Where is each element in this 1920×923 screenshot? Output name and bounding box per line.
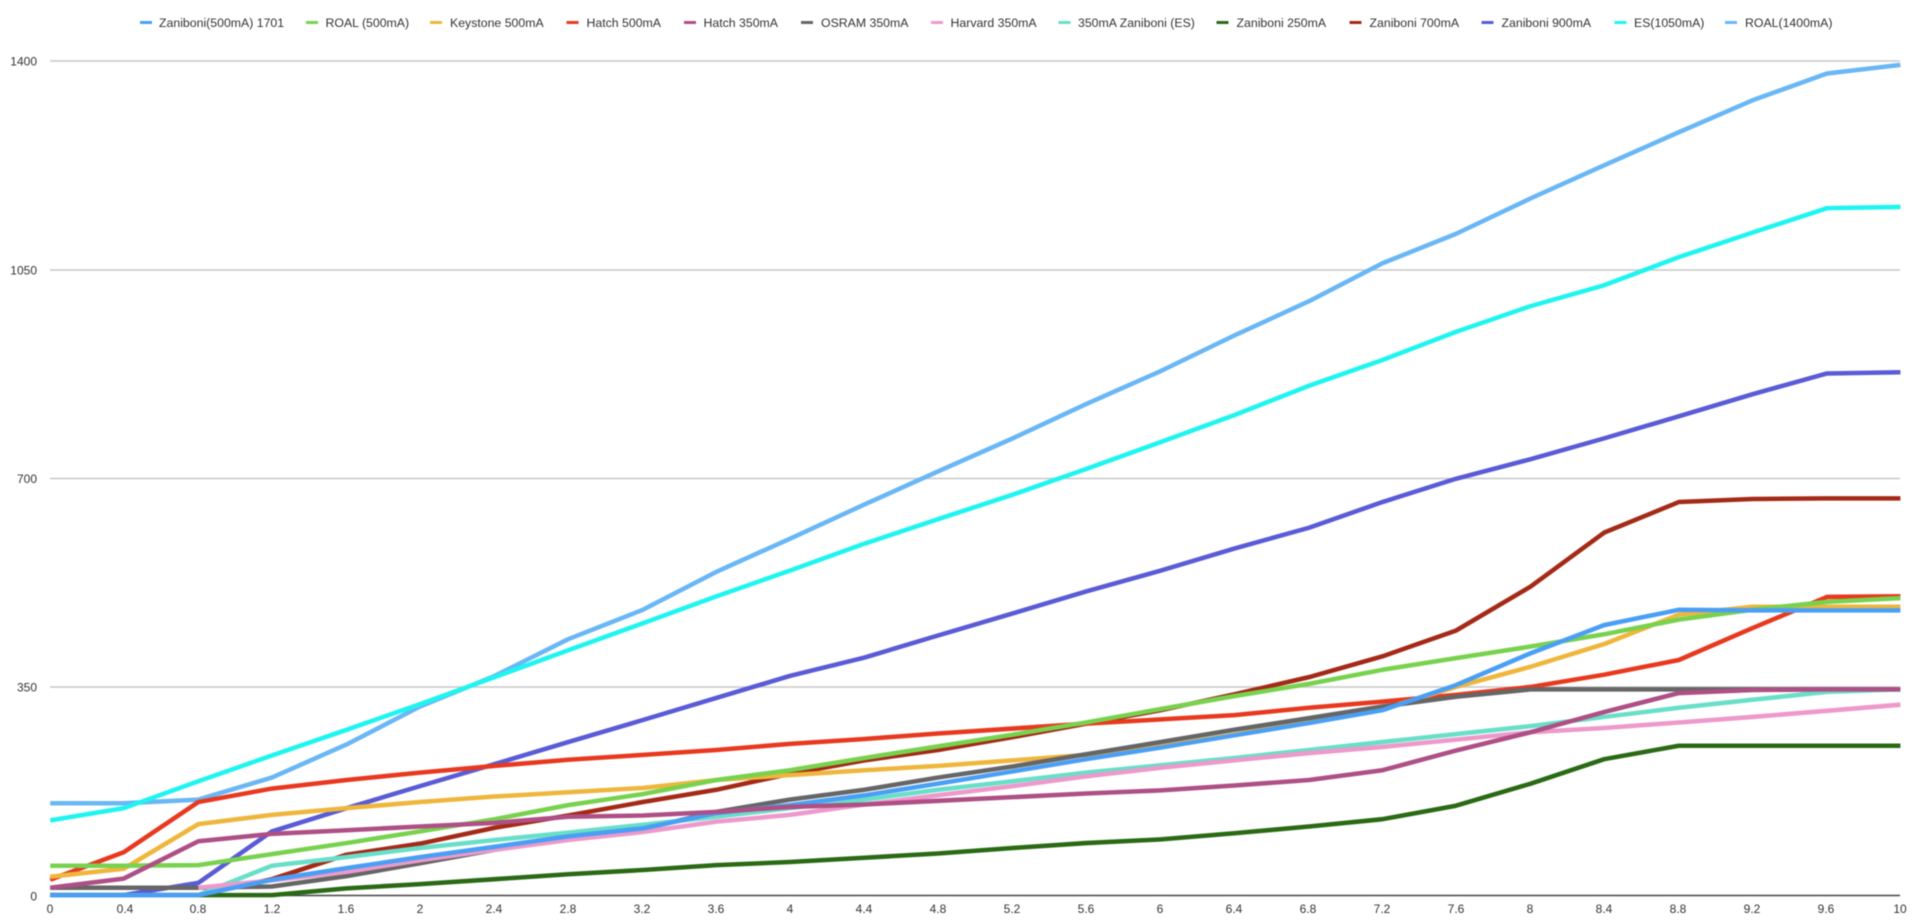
y axis labels	[10, 54, 37, 904]
legend item: Zaniboni(500mA) 1701: Zaniboni(500mA) 1701	[159, 16, 284, 30]
x axis labels: 7.2	[1374, 902, 1391, 916]
x axis labels: 6	[1157, 902, 1164, 916]
x axis labels: 0.8	[190, 902, 207, 916]
legend	[140, 16, 1832, 30]
x axis labels: 1.2	[264, 902, 281, 916]
y axis labels: 350	[17, 680, 37, 694]
x axis labels: 0.4	[117, 902, 134, 916]
x axis labels: 8.8	[1670, 902, 1687, 916]
x axis labels: 4.4	[856, 902, 873, 916]
x axis labels: 8.4	[1596, 902, 1613, 916]
line: ROAL(1400mA)	[50, 65, 1900, 803]
x axis labels: 6.4	[1226, 902, 1243, 916]
legend item: Zaniboni 700mA: Zaniboni 700mA	[1370, 16, 1460, 30]
line: Zaniboni 900mA	[50, 372, 1900, 895]
legend item: OSRAM 350mA: OSRAM 350mA	[821, 16, 909, 30]
x axis labels: 6.8	[1300, 902, 1317, 916]
line: Zaniboni 700mA	[50, 498, 1900, 895]
x axis labels	[47, 902, 1907, 916]
x axis labels: 1.6	[338, 902, 355, 916]
x axis labels: 3.2	[634, 902, 651, 916]
x axis labels: 9.6	[1818, 902, 1835, 916]
legend item: Keystone 500mA: Keystone 500mA	[450, 16, 544, 30]
line: ROAL (500mA)	[50, 598, 1900, 866]
x axis labels: 4	[787, 902, 794, 916]
legend item: ROAL(1400mA): ROAL(1400mA)	[1745, 16, 1832, 30]
x axis labels: 4.8	[930, 902, 947, 916]
legend item: Zaniboni 900mA: Zaniboni 900mA	[1502, 16, 1592, 30]
y axis labels: 1400	[10, 54, 37, 68]
line: 350mA Zaniboni (ES)	[50, 689, 1900, 895]
legend item: 350mA Zaniboni (ES): 350mA Zaniboni (ES)	[1078, 16, 1195, 30]
x axis labels: 3.6	[708, 902, 725, 916]
x axis labels: 8	[1527, 902, 1534, 916]
line: Hatch 500mA	[50, 596, 1900, 880]
legend item: Hatch 500mA: Hatch 500mA	[586, 16, 662, 30]
legend item: Zaniboni 250mA: Zaniboni 250mA	[1236, 16, 1327, 30]
line: Hatch 350mA	[50, 689, 1900, 888]
y axis labels: 1050	[10, 264, 37, 278]
x axis labels: 2.8	[560, 902, 577, 916]
x axis labels: 5.6	[1078, 902, 1095, 916]
x axis labels: 2	[417, 902, 424, 916]
line: Zaniboni(500mA) 1701	[50, 610, 1900, 895]
x axis labels: 5.2	[1004, 902, 1021, 916]
x axis labels: 2.4	[486, 902, 503, 916]
y axis labels: 0	[30, 890, 37, 904]
x axis labels: 9.2	[1744, 902, 1761, 916]
legend item: ES(1050mA): ES(1050mA)	[1634, 16, 1704, 30]
line: Keystone 500mA	[50, 607, 1900, 877]
legend item: Harvard 350mA: Harvard 350mA	[950, 16, 1037, 30]
x axis labels: 10	[1893, 902, 1907, 916]
line: ES(1050mA)	[50, 207, 1900, 820]
x axis labels: 0	[47, 902, 54, 916]
line: Zaniboni 250mA	[50, 746, 1900, 895]
line: OSRAM 350mA	[50, 689, 1900, 888]
legend item: Hatch 350mA: Hatch 350mA	[704, 16, 779, 30]
x axis labels: 7.6	[1448, 902, 1465, 916]
y axis labels: 700	[17, 472, 37, 486]
legend item: ROAL (500mA): ROAL (500mA)	[326, 16, 409, 30]
line: Harvard 350mA	[198, 705, 1900, 888]
